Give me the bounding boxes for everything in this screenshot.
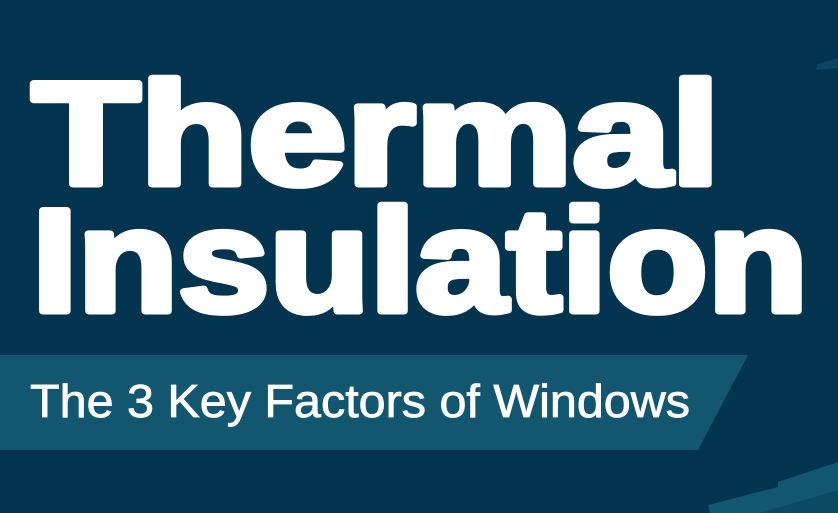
decorative shape top right [816,58,838,70]
subtitle banner [0,355,748,450]
title: Insulation [32,179,808,342]
subtitle text: The 3 Key Factors of Windows [30,375,690,427]
decorative shape bottom right [708,462,838,513]
title: Thermal [32,52,720,215]
title [32,52,808,342]
